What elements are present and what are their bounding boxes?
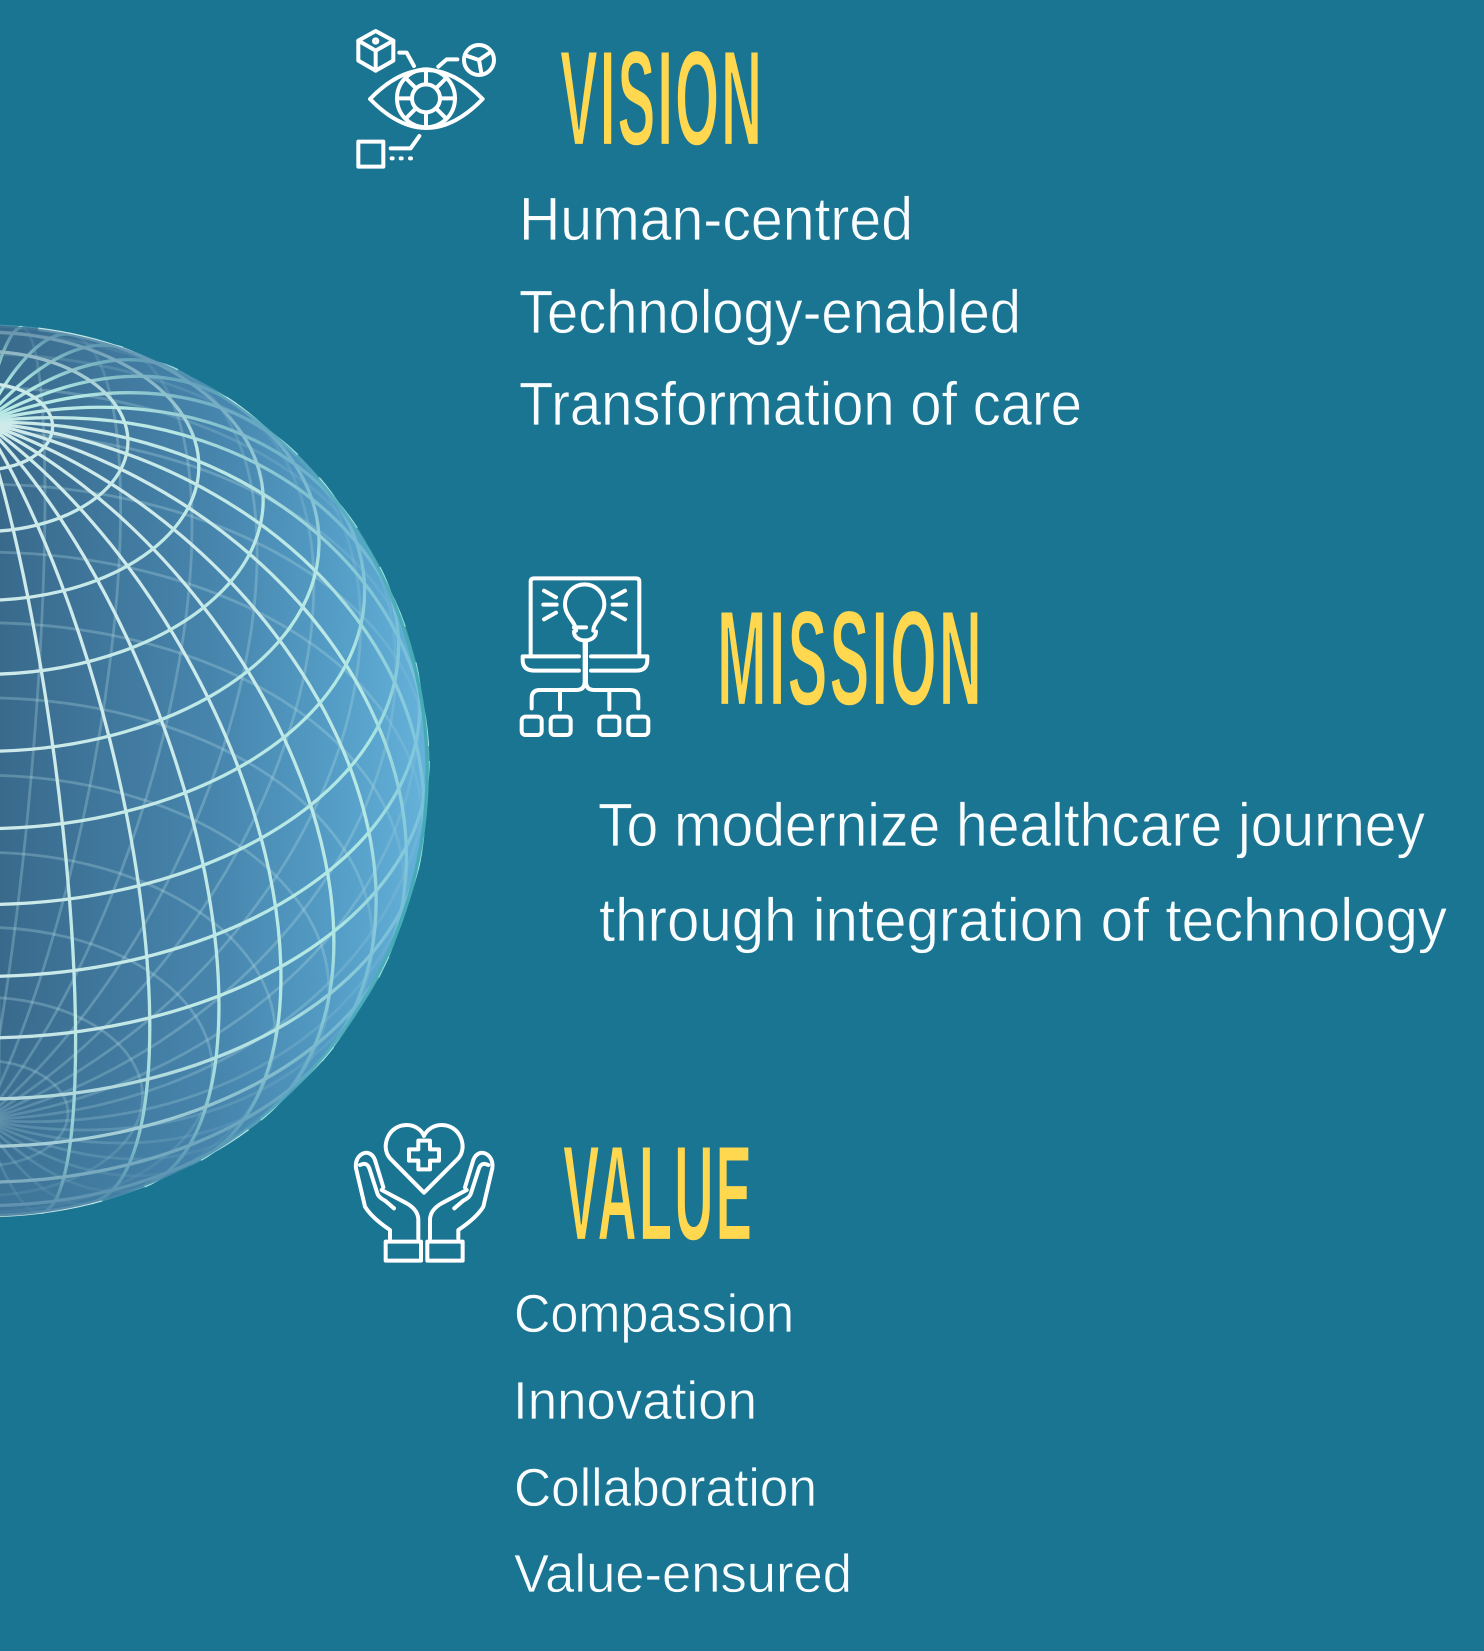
globe rim	[132, 353, 427, 1189]
vision section	[358, 22, 1082, 438]
mission section	[522, 578, 1447, 954]
lower fade	[0, 326, 428, 1216]
front grid lines	[0, 247, 531, 1216]
value section: VALUE	[563, 1117, 754, 1269]
globe fill	[0, 326, 428, 1216]
line: to modernize healthcare journey: To modernize healthcare journey	[598, 791, 1425, 859]
vision text	[519, 185, 1082, 438]
icon: eye with cube, wheel and square	[358, 31, 494, 167]
value section	[356, 1117, 852, 1604]
icon: hands holding heart with cross	[356, 1125, 492, 1261]
line: human-centred: Human-centred	[519, 185, 913, 253]
limb shading	[0, 325, 429, 1217]
mission section: MISSION	[717, 582, 984, 734]
line: value-ensured: Value-ensured	[514, 1544, 852, 1604]
line: collaboration: Collaboration	[514, 1458, 817, 1518]
back grid lines	[0, 326, 532, 1295]
line: compassion: Compassion	[514, 1284, 794, 1344]
value text	[513, 1284, 852, 1604]
icon: laptop lightbulb network	[522, 578, 648, 735]
globe	[0, 324, 430, 1217]
line: technology-enabled: Technology-enabled	[519, 278, 1021, 346]
line: through integration of technology: through integration of technology	[599, 886, 1447, 954]
line: innovation: Innovation	[513, 1371, 757, 1431]
vision section: VISION	[560, 22, 764, 174]
mission text	[598, 791, 1447, 954]
line: transformation of care: Transformation of care	[519, 370, 1082, 438]
